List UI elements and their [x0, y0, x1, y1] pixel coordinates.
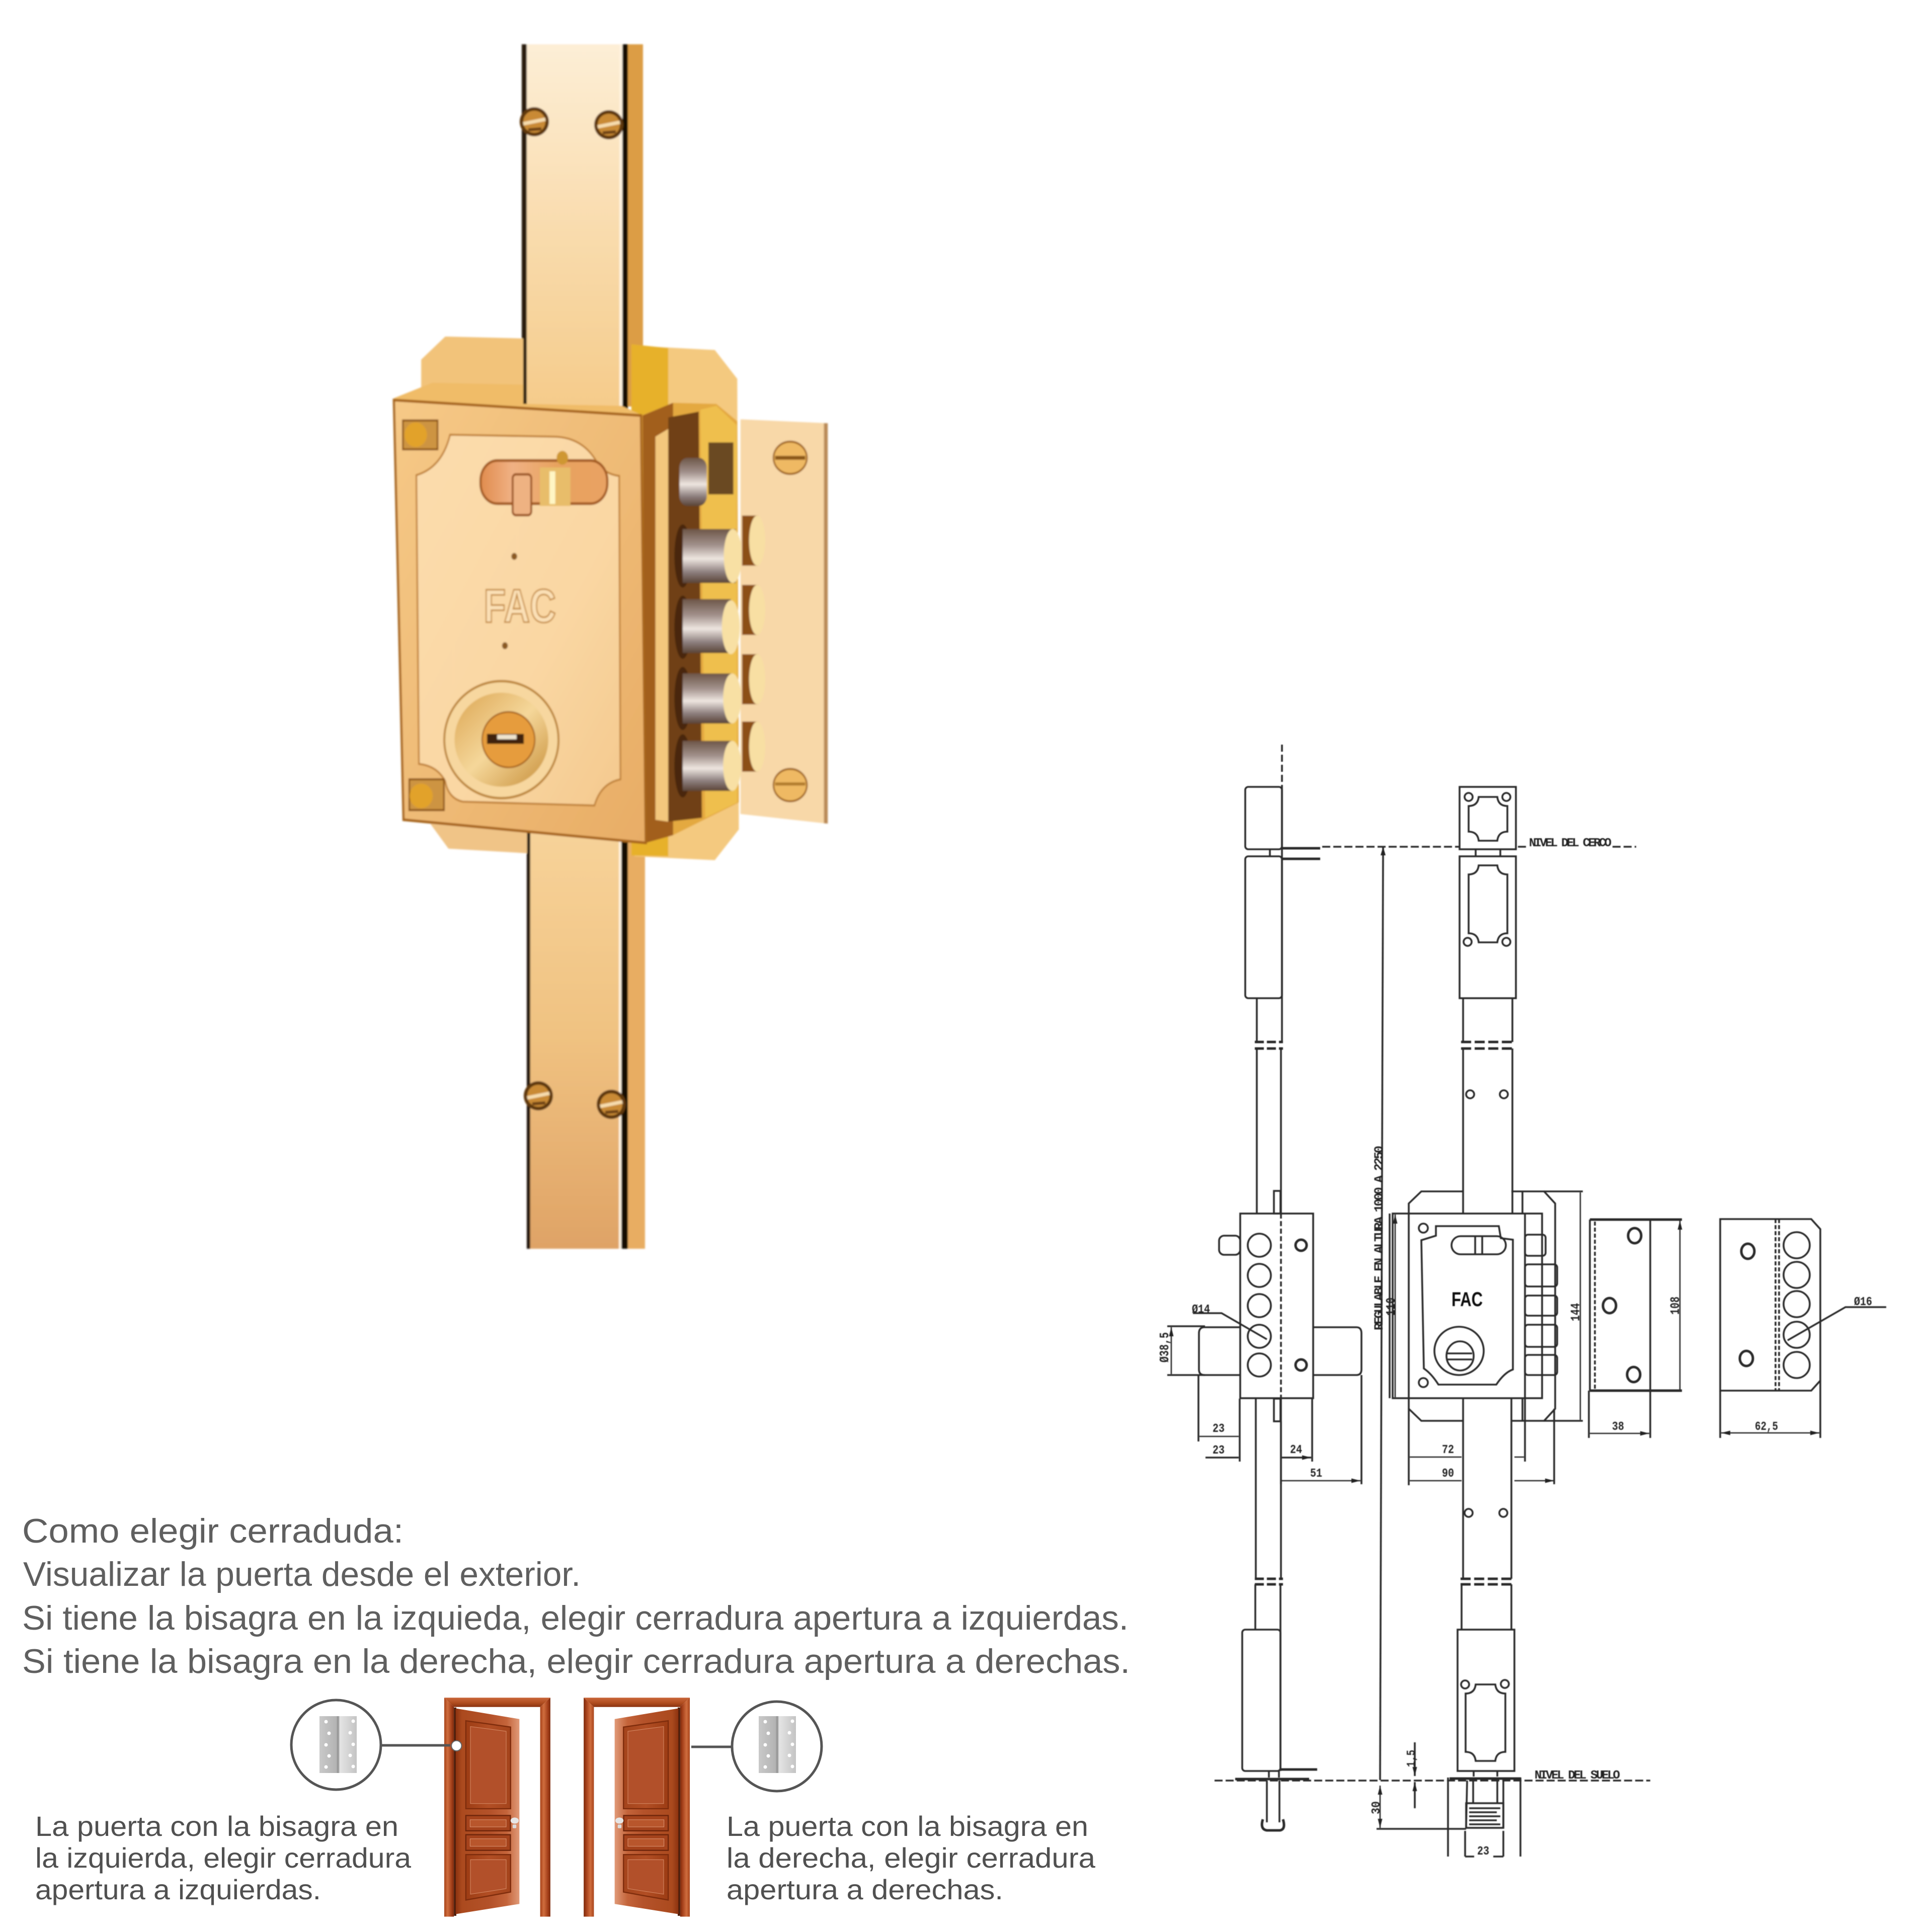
front view dimensions [1370, 847, 1583, 1859]
key cylinder [444, 681, 558, 798]
front elevation view [1393, 787, 1557, 1828]
front view dimensions: 30 [1370, 1801, 1384, 1814]
caption: right hinge [727, 1810, 1096, 1905]
strike plate view, hinge side: 108 [1668, 1297, 1683, 1315]
embossed logo: FAC [484, 580, 556, 632]
sliding latch knob [480, 451, 607, 515]
panel rivets [502, 553, 517, 649]
level lines and labels: NIVEL DEL SUELO [1535, 1769, 1620, 1783]
lock assembly [394, 337, 828, 860]
back plate right [631, 344, 739, 860]
bottom vertical rod [524, 825, 645, 1249]
front view dimensions: 72 [1442, 1443, 1454, 1457]
strike plate view, hinge side [1589, 1220, 1683, 1438]
corner screw bottom [410, 779, 444, 810]
front view dimensions: 23 [1477, 1845, 1489, 1859]
instruction line 1: Visualizar la puerta desde el exterior. [23, 1555, 581, 1593]
side view dimensions: 51 [1310, 1467, 1322, 1481]
instruction line 2: Si tiene la bisagra en la izquieda, elegir cerradura apertura a izquierdas. [22, 1599, 1129, 1637]
callout: left hinge [291, 1700, 450, 1790]
top vertical rod [520, 44, 643, 412]
front bolts [674, 524, 742, 797]
front view dimensions: 144 [1568, 1303, 1583, 1321]
caption: left hinge [35, 1810, 412, 1905]
level lines and labels: NIVEL DEL CERCO [1529, 837, 1612, 850]
corner screw top [403, 421, 438, 449]
front view dimensions: REGULABLE EN ALTURA 1000 A 2250 [1372, 1146, 1387, 1330]
product photo: gold multipoint lock [394, 44, 828, 1249]
inner raised panel [417, 435, 620, 806]
instructions text block [22, 1512, 1130, 1680]
technical drawing [1157, 745, 1886, 1859]
top bolt [680, 442, 734, 506]
icon: right hinged door [584, 1698, 690, 1917]
front elevation view: FAC [1452, 1289, 1483, 1311]
side view dimensions [1157, 1303, 1886, 1484]
caption: left hinge: la izquierda, elegir cerradura [35, 1842, 412, 1874]
strike plate view, hinge side: 38 [1612, 1420, 1624, 1434]
side of lock case [641, 403, 739, 843]
side view dimensions: 23 [1213, 1422, 1225, 1436]
heading line: Como elegir cerraduda: [22, 1512, 404, 1550]
lock front face [394, 400, 646, 843]
side elevation view [1199, 745, 1361, 1830]
caption: left hinge: apertura a izquierdas. [35, 1874, 321, 1905]
side view dimensions: 23 [1213, 1444, 1225, 1458]
caption: right hinge: apertura a derechas. [727, 1874, 1003, 1905]
back plate lower left [426, 814, 527, 853]
caption: right hinge: la derecha, elegir cerradura [727, 1842, 1096, 1874]
front view dimensions: 110 [1384, 1298, 1399, 1316]
caption: left hinge: La puerta con la bisagra en [35, 1810, 398, 1842]
side view dimensions: Ø14 [1192, 1303, 1210, 1317]
back plate upper left [421, 337, 523, 402]
side view dimensions: 24 [1290, 1443, 1302, 1457]
bolt plate view: Ø16 [1854, 1296, 1872, 1309]
bolt plate view [1720, 1219, 1872, 1438]
front view dimensions: 1,5 [1405, 1750, 1419, 1767]
instruction line 3: Si tiene la bisagra en la derecha, elegir cerradura apertura a derechas. [22, 1642, 1130, 1680]
strike plate [741, 419, 828, 824]
caption: right hinge: La puerta con la bisagra en [727, 1810, 1088, 1842]
lock top surface [394, 383, 642, 416]
icon: left hinged door [444, 1698, 550, 1917]
front view dimensions: 90 [1442, 1467, 1454, 1481]
level lines and labels [1215, 837, 1650, 1783]
rear bolts [742, 516, 765, 772]
callout: right hinge [691, 1702, 822, 1791]
bolt plate view: 62,5 [1755, 1420, 1778, 1434]
side view dimensions: Ø38,5 [1157, 1332, 1172, 1362]
